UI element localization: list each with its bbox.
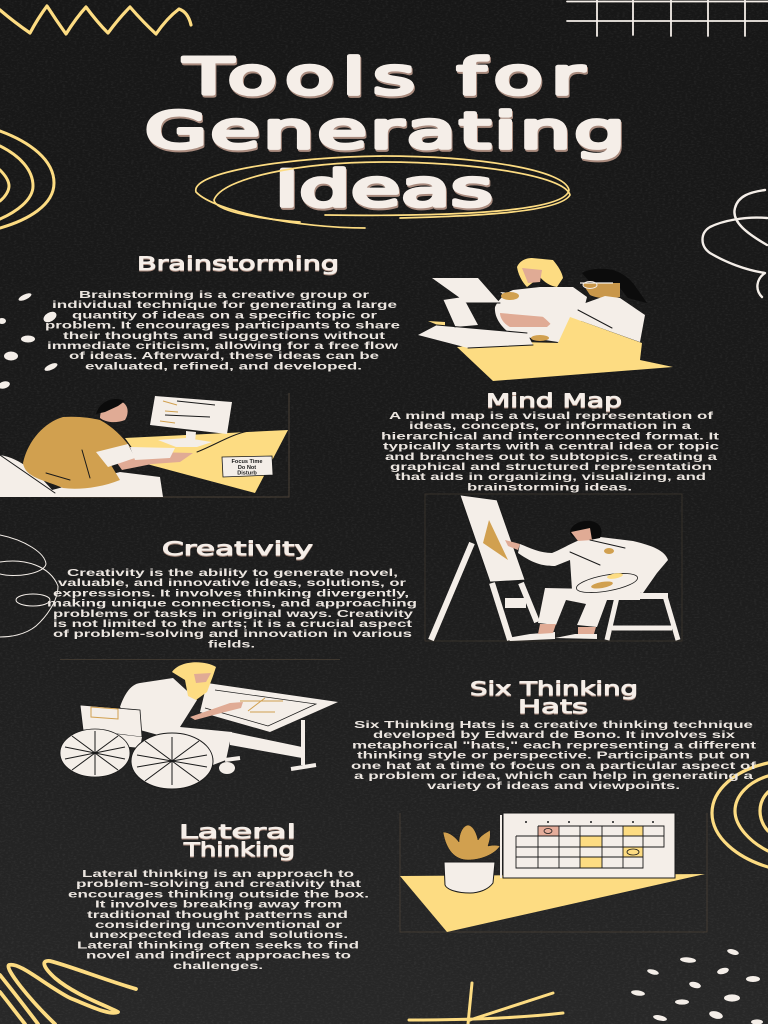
text: Mind Map: A mind map is a visual representation of: [389, 411, 714, 422]
text: Brainstorming: Brainstorming is a creative group or: [79, 290, 369, 301]
decoration: left white specks: [0, 292, 59, 390]
text: Creativity: Creativity is the ability to generate novel,: [67, 568, 398, 579]
text: Brainstorming: evaluated, refined, and developed.: [85, 361, 362, 372]
heading: Lateral Thinking: Lateral: [179, 822, 296, 843]
text: Six Thinking Hats: one hat at a time to focus on a particular aspect of: [351, 761, 757, 772]
text: Brainstorming: their thoughts and suggestions without: [63, 331, 386, 342]
decoration: right yellow spiral: [712, 763, 768, 867]
text: Creativity: expressions. It involves thinking divergently,: [53, 588, 409, 599]
text: Six Thinking Hats: Six Thinking Hats is a creative thinking technique: [354, 720, 753, 731]
decoration: bottom-left yellow scribble: [0, 961, 136, 1024]
illustration: person at desk with monitor: [0, 393, 289, 497]
text: Lateral Thinking: [68, 869, 369, 972]
text: Mind Map: graphical and structured representation: [390, 462, 712, 473]
text: Six Thinking Hats: a problem or idea, which can help in generating a: [354, 771, 753, 782]
decoration: thin white scribble: [0, 535, 58, 637]
sign text: Disturb: [237, 470, 257, 476]
decoration: bottom-right white specks: [631, 948, 763, 1024]
text: Six Thinking Hats: variety of ideas and viewpoints.: [427, 781, 680, 792]
heading: Brainstorming: Brainstorming: [137, 254, 339, 275]
decoration: bottom yellow star: [409, 983, 563, 1024]
text: Lateral Thinking: challenges.: [173, 961, 263, 972]
text: Brainstorming: problem. It encourages participants to share: [45, 321, 400, 332]
text: Mind Map: brainstorming ideas.: [467, 482, 632, 493]
heading: Six Thinking Hats: Six Thinking: [470, 679, 638, 700]
text: Six Thinking Hats: thinking style or perspective. Participants put on: [357, 751, 750, 762]
heading: Six Thinking Hats: [470, 679, 638, 718]
text: Mind Map: ideas, concepts, or information in a: [409, 421, 691, 432]
text: Brainstorming: of ideas. Afterward, these ideas can be: [69, 351, 379, 362]
potted plant: [443, 825, 500, 893]
text: Lateral Thinking: novel and indirect approaches to: [86, 951, 351, 962]
text: Mind Map: hierarchical and interconnected format. It: [381, 431, 720, 442]
text: Lateral Thinking: considering unconventional or: [95, 920, 342, 931]
heading: Creativity: Creativity: [162, 539, 313, 560]
text: Brainstorming: individual technique for generating a large: [52, 300, 397, 311]
illustration: person in wheelchair at drafting table: [60, 660, 340, 789]
heading: Lateral Thinking: Thinking: [183, 840, 295, 861]
sign text: Do Not: [238, 465, 256, 471]
text: Six Thinking Hats: [351, 720, 757, 792]
text: Creativity: [47, 568, 417, 650]
text: Lateral Thinking: unexpected ideas and solutions.: [89, 930, 348, 941]
text: Six Thinking Hats: metaphorical "hats," each representing a different: [352, 740, 757, 751]
decoration: yellow zigzag: [0, 6, 191, 34]
title: Generating: [145, 102, 625, 160]
text: Creativity: problems or tasks in original ways. Creativity: [53, 609, 413, 620]
decoration: left yellow spiral: [0, 131, 54, 228]
illustration: two people at a laptop: [418, 258, 673, 381]
text: Creativity: making unique connections, and approaching: [47, 599, 417, 610]
text: Creativity: fields.: [208, 639, 255, 650]
heading: Six Thinking Hats: Hats: [518, 697, 588, 718]
text: Lateral Thinking: It involves breaking away from: [95, 900, 342, 911]
illustration: painter at easel: [425, 494, 682, 641]
text: Brainstorming: quantity of ideas on a specific topic or: [72, 310, 377, 321]
title: [145, 48, 625, 218]
title: Tools for: [183, 48, 585, 106]
decoration: white grid: [567, 0, 768, 36]
text: Lateral Thinking: Lateral thinking often seeks to find: [77, 940, 359, 951]
text: Mind Map: that aids in organizing, visualizing, and: [395, 472, 706, 483]
heading: Lateral Thinking: [179, 822, 296, 861]
sign text: Focus Time: [232, 459, 262, 465]
sign text: [232, 459, 262, 476]
calendar: [501, 813, 675, 878]
text: Creativity: is not limited to the arts; it is a crucial aspect: [53, 619, 413, 630]
text: Mind Map: and branches out to subtopics, creating a: [385, 452, 717, 463]
text: Brainstorming: immediate criticism, allowing for a free flow: [47, 341, 399, 352]
text: Lateral Thinking: Lateral thinking is an approach to: [82, 869, 354, 880]
text: Creativity: of problem-solving and innovation in various: [53, 629, 412, 640]
text: Mind Map: typically starts with a central idea or topic: [383, 442, 719, 453]
text: Mind Map: [381, 411, 720, 493]
text: Six Thinking Hats: developed by Edward de Bono. It involves six: [373, 730, 735, 741]
text: Lateral Thinking: encourages thinking outside the box.: [68, 889, 369, 900]
title scribble oval: [196, 156, 570, 228]
heading: Mind Map: Mind Map: [486, 391, 622, 412]
text: Creativity: valuable, and innovative ideas, solutions, or: [58, 578, 406, 589]
illustration: calendar and potted plant: [400, 813, 707, 932]
text: Lateral Thinking: problem-solving and creativity that: [76, 879, 362, 890]
text: Lateral Thinking: traditional thought patterns and: [87, 910, 348, 921]
title: Ideas: [275, 160, 493, 218]
text: Brainstorming: [45, 290, 400, 372]
decoration: right white scribble: [702, 190, 767, 297]
